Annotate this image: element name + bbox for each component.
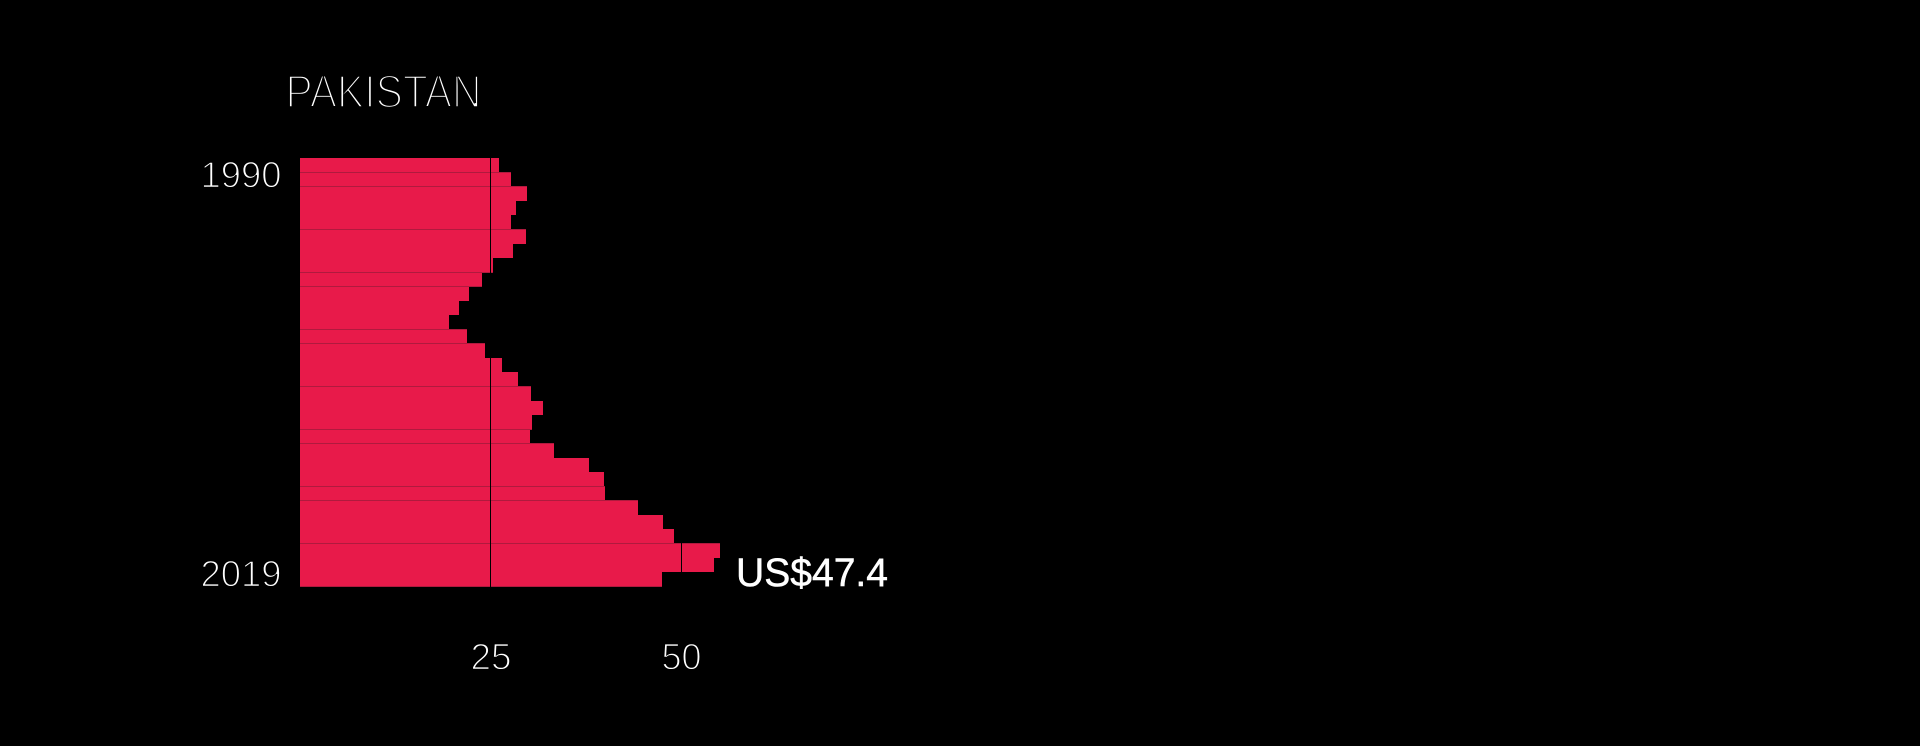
bars	[300, 158, 720, 586]
title: PAKISTAN	[286, 66, 482, 118]
label: end year: 2019	[200, 554, 282, 594]
bar chart	[300, 158, 720, 587]
gridline 25	[490, 158, 491, 587]
label: start year: 1990	[200, 154, 282, 196]
axis label 50: 50	[662, 636, 702, 678]
bar separators	[300, 172, 720, 587]
gridline 50	[681, 543, 682, 572]
axis label 25: 25	[470, 636, 512, 678]
value label: US$47.4	[736, 551, 888, 595]
